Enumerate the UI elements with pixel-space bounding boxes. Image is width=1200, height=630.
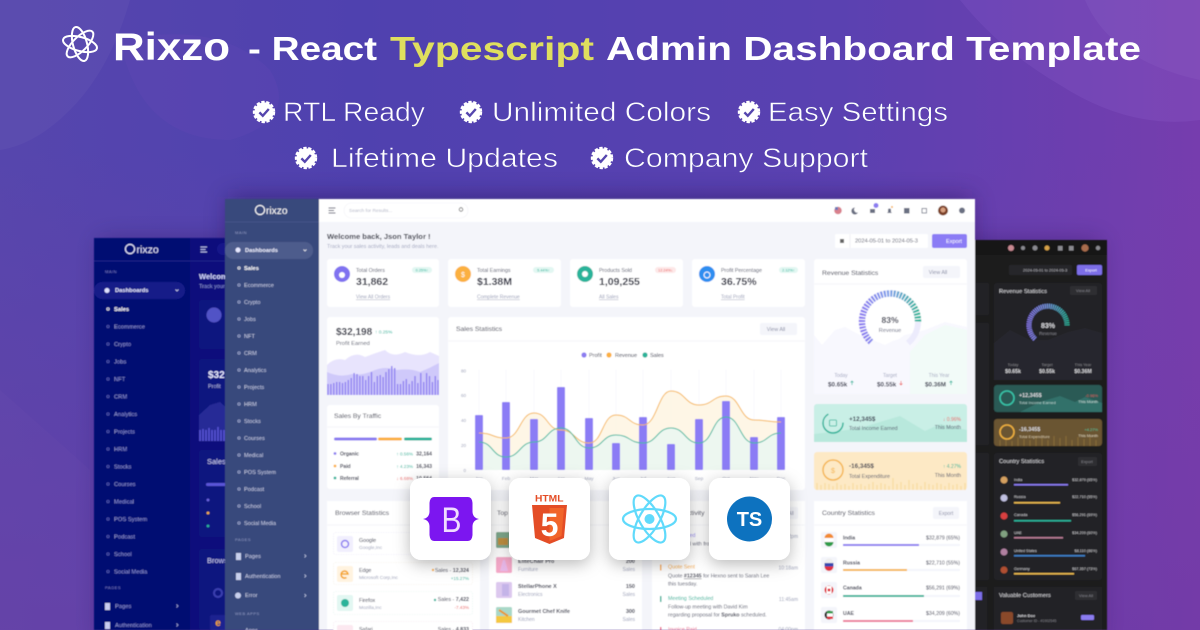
navy sidebar menu: HRM <box>114 447 127 453</box>
browser: firefox: Firefox <box>359 598 376 604</box>
card: products sold: 1,09,255 <box>599 276 640 288</box>
export button <box>932 234 967 248</box>
card: total income: Total Income Earned <box>849 426 898 432</box>
card: products sold <box>570 259 683 307</box>
dark country card: $34,209 (60%) <box>1072 531 1098 535</box>
card: profit earned: Profit Earned <box>336 341 370 347</box>
browser: firefox <box>334 592 472 614</box>
panel: main sidebar: MAIN <box>235 230 247 235</box>
navy sidebar menu: Ecommerce <box>114 324 145 330</box>
panel: dark navy dashboard: Profit <box>208 384 221 390</box>
panel: main sidebar: Sales <box>244 266 259 272</box>
dark country card <box>994 453 1102 580</box>
card: top products: Furniture <box>518 567 538 573</box>
card: sales statistics chart: May <box>584 476 594 482</box>
dark revenue card: Today <box>1008 362 1018 367</box>
dark customers card <box>994 587 1102 630</box>
card: recent activity: 11:45am <box>779 597 798 603</box>
navy sidebar menu: School <box>114 552 132 558</box>
active menu item: Dashboards <box>245 248 278 254</box>
dark income card: +12,345$ <box>1019 393 1042 399</box>
dark country card: Export <box>1081 459 1094 464</box>
welcome heading: Track your sales activity, leads and deals here. <box>327 244 438 250</box>
card: revenue statistics: This Year <box>929 373 950 379</box>
tile: react logo <box>609 478 690 560</box>
card: total earnings: Complete Revenue <box>477 294 520 300</box>
card: total earnings <box>448 259 561 307</box>
sidebar menu: Projects <box>244 385 264 391</box>
dark export button <box>1077 265 1102 275</box>
navy sidebar menu: Jobs <box>114 360 126 366</box>
welcome heading: Welcome back, Json Taylor ! <box>327 232 431 241</box>
sidebar menu: Pages <box>245 554 261 560</box>
card: sales statistics chart: Sep <box>695 476 704 482</box>
card: sales by traffic: Organic <box>340 452 359 458</box>
export button: Export <box>946 239 962 245</box>
panel: dark navy dashboard: Sales <box>207 457 226 466</box>
country rows: $34,209 (60%) <box>926 611 960 617</box>
panel: dark navy dashboard <box>94 238 239 630</box>
dark country card: Russia <box>1014 495 1026 499</box>
dark country card: $32,879 (65%) <box>1072 478 1098 482</box>
card: total income <box>814 404 967 442</box>
card: products sold: Products Sold <box>599 268 632 274</box>
card: profit earned: $32,198 <box>336 327 373 338</box>
card: sales by traffic <box>327 405 439 489</box>
card: revenue statistics <box>814 259 967 394</box>
card: profit percentage: Total Profit <box>721 294 745 300</box>
panel: dark navy dashboard: Brows <box>207 556 228 565</box>
dark revenue card: Target <box>1041 362 1053 367</box>
country rows <box>843 536 960 617</box>
card: total expenditure: -16,345$ <box>849 463 874 470</box>
card: top products: Sales <box>622 567 635 573</box>
sidebar menu: School <box>244 504 261 510</box>
sidebar menu: Podcast <box>244 487 265 493</box>
card: sales by traffic: ↓ 6.68% <box>396 476 413 481</box>
dark country card: $22,710 (55%) <box>1072 495 1098 499</box>
feature list: RTL Ready <box>283 97 426 127</box>
browser: edge <box>334 562 472 584</box>
card: sales statistics chart: View All <box>767 327 785 333</box>
feature list: Company Support <box>624 143 869 173</box>
card: sales statistics chart: Jul <box>640 476 646 482</box>
card: sales by traffic: ↑ 0.56% <box>396 452 413 456</box>
card: top products: Electronics <box>518 592 543 598</box>
country rows: $32,879 (65%) <box>926 536 960 542</box>
dark country card: India <box>1014 478 1023 482</box>
card: total earnings: 5.44%↑ <box>537 268 550 272</box>
dark income card: This Month <box>1078 399 1098 404</box>
dark expenditure card: -16,345$ <box>1019 427 1040 433</box>
card: sales statistics chart: Aug <box>667 476 676 482</box>
sidebar menu: Authentication <box>245 574 280 580</box>
sidebar menu: Social Media <box>244 521 277 527</box>
navy sidebar menu: POS System <box>114 517 147 523</box>
country rows: India <box>843 536 855 542</box>
browser: edge: Microsoft Corp,Inc <box>359 575 399 581</box>
card: top products: 150 <box>626 584 635 590</box>
card: recent activity: this tuesday. <box>668 582 697 588</box>
card: country statistics: Export <box>939 511 954 517</box>
sidebar menu: Stocks <box>244 419 261 425</box>
card: top products: 300 <box>626 609 635 615</box>
dark header icons <box>1008 244 1100 252</box>
dark revenue card: $0.65k <box>1005 369 1021 375</box>
chart legend <box>581 352 664 359</box>
card: recent activity: regarding proposal for Spruko scheduled. <box>668 612 767 618</box>
card: total expenditure: This Month <box>935 473 961 479</box>
bars <box>475 387 785 470</box>
sidebar menu: Jobs <box>244 317 256 323</box>
gauge: Revenue <box>879 328 901 334</box>
card: sales statistics chart: Apr <box>557 476 565 482</box>
dark expenditure card: This Month <box>1078 433 1098 438</box>
card: top products: Gourmet Chef Knife <box>518 609 570 615</box>
navy sidebar menu: Analytics <box>114 412 137 418</box>
sidebar menu: CRM <box>244 351 257 357</box>
tile: bootstrap logo: B <box>442 501 462 540</box>
chart legend: Sales <box>650 353 664 359</box>
browser: edge: Edge <box>359 568 371 574</box>
sidebar menu: Courses <box>244 436 265 442</box>
card: revenue statistics: Revenue Statistics <box>822 270 879 277</box>
card: total orders <box>327 259 439 307</box>
card: products sold: 12.24%↓ <box>658 268 673 272</box>
panel: dark navy dashboard: Dashboards <box>115 288 149 294</box>
card: total expenditure: Total Expenditure <box>849 474 890 480</box>
header icons <box>834 203 965 216</box>
panel: dark navy dashboard: Welcome <box>199 272 232 281</box>
card: total expenditure: $ <box>831 466 836 475</box>
title: - React <box>248 30 377 67</box>
dark country card: UAE <box>1014 531 1022 535</box>
panel: dark navy dashboard: e <box>215 618 221 629</box>
dark left fragments <box>975 283 989 315</box>
card: revenue statistics: Target <box>883 373 898 379</box>
dark revenue card: $0.36M <box>1074 369 1092 375</box>
card: recent activity: 10:18am <box>779 566 798 572</box>
dark country card: Canada <box>1014 513 1028 517</box>
sidebar logo: rixzo <box>266 206 288 217</box>
dark country card: United States <box>1014 549 1037 553</box>
chart axes: 20 <box>461 443 466 448</box>
card: sales statistics chart: Oct <box>722 476 730 482</box>
navy sidebar menu: Courses <box>114 482 136 488</box>
card: recent activity: Recent Activity <box>660 510 705 517</box>
chart axes: 60 <box>461 393 466 398</box>
panel: dark navy dashboard: MAIN <box>105 269 117 274</box>
card: sales statistics chart: Jun <box>612 476 620 482</box>
card: sales by traffic: Referral <box>340 476 360 482</box>
card: recent activity: Deal Added <box>668 533 695 539</box>
card: sales statistics chart: Sales Statistics <box>456 326 503 333</box>
card: profit percentage: 36.75% <box>721 276 757 288</box>
sidebar menu: NFT <box>244 334 255 340</box>
card: top products: Sales <box>622 617 635 623</box>
navy sidebar menu: Projects <box>114 430 135 436</box>
panel: dark dashboard <box>960 240 1107 630</box>
card: top products: 200 <box>626 559 635 565</box>
feature list: Lifetime Updates <box>331 143 558 173</box>
tile: typescript logo: TS <box>737 509 762 531</box>
card: total income: +12,345$ <box>849 416 876 423</box>
navy sidebar menu: Stocks <box>114 464 131 470</box>
card: top products: EliteChair Pro <box>518 559 555 565</box>
header bar: Search for Results... <box>349 208 392 214</box>
title: Typescript <box>390 30 594 67</box>
title: Rixzo <box>113 26 230 69</box>
date range <box>835 234 928 248</box>
card: recent activity: 09:32pm <box>779 534 798 540</box>
card: sales by traffic: Paid <box>340 464 351 470</box>
feature list <box>254 97 948 173</box>
card: top products: Sales <box>622 592 635 598</box>
tile: typescript logo <box>709 478 790 560</box>
dark revenue card: 83% <box>1041 323 1056 330</box>
card: revenue statistics: View All <box>929 270 947 276</box>
country rows: Russia <box>843 560 860 566</box>
dark customers card: Customer ID - #1902545 <box>1017 619 1056 623</box>
dark income card: -0.96% <box>1085 393 1098 398</box>
sidebar menu: Medical <box>244 453 263 459</box>
dark country card: Germany <box>1014 567 1030 571</box>
title: Admin Dashboard Template <box>606 30 1141 67</box>
card: revenue statistics: $0.55k <box>877 382 897 388</box>
card: sales statistics chart: Feb <box>502 476 510 482</box>
card: recent activity: Quote #12345 for Hexno sent to Sarah Lee <box>668 574 769 580</box>
browser: google: Google <box>359 538 376 544</box>
card: sales statistics chart: Mar <box>530 476 539 482</box>
dark revenue card <box>994 283 1102 380</box>
chart legend: Revenue <box>615 353 637 359</box>
chart axes: 80 <box>461 368 466 374</box>
navy logo <box>125 244 159 256</box>
dark revenue card: This Year <box>1075 362 1092 367</box>
dark expenditure card: Total Expenditure <box>1019 434 1051 439</box>
dark expenditure card: +4.27% <box>1084 427 1098 432</box>
chart axes <box>461 368 466 473</box>
gauge: 83% <box>881 315 899 325</box>
navy sidebar menu: Podcast <box>114 534 135 540</box>
panel: dark navy dashboard: Sales <box>114 307 129 313</box>
panel: dark navy dashboard: PAGES <box>105 585 121 590</box>
card: recent activity: Follow-up meeting with David Kim <box>668 604 748 610</box>
chart legend: Profit <box>589 353 602 359</box>
browser: google <box>334 532 472 554</box>
browser: firefox: Mozilla,Inc <box>359 605 382 611</box>
country rows: UAE <box>843 611 854 617</box>
card: revenue statistics: $0.36M <box>925 382 946 388</box>
card: top products: Top Products <box>497 510 537 517</box>
navy sidebar menu <box>114 324 152 629</box>
country rows: Canada <box>843 586 862 592</box>
sidebar menu: POS System <box>244 470 276 476</box>
card: sales statistics chart: Jan <box>475 476 483 482</box>
active menu item <box>225 242 313 259</box>
card: sales by traffic: 32,164 <box>416 452 432 458</box>
dark customers card: John Doe <box>1017 613 1036 618</box>
card: revenue statistics: $0.65k <box>828 382 848 388</box>
navy sidebar menu: Social Media <box>114 570 148 576</box>
card: total expenditure: ↑ 4.27% <box>943 464 962 470</box>
navy sidebar menu: NFT <box>114 377 126 383</box>
navy sidebar menu: Authentication <box>115 623 152 629</box>
sidebar menu <box>244 283 280 630</box>
card: top products <box>489 501 642 630</box>
tile: html5 logo: 5 <box>541 507 558 543</box>
dark country card: $8,110 (86%) <box>1074 549 1098 553</box>
panel: dark dashboard: 2024-05-01 to 2024-05-3 <box>1023 268 1068 272</box>
card: profit percentage <box>692 259 805 307</box>
sidebar menu: HRM <box>244 402 257 408</box>
tile: bootstrap logo <box>410 478 491 560</box>
dark country card: Country Statistics <box>999 459 1044 465</box>
feature list: Easy Settings <box>768 97 948 127</box>
card: browser statistics <box>327 501 480 630</box>
sidebar menu: Ecommerce <box>244 283 274 289</box>
icon: rixzo logo <box>61 25 99 63</box>
country rows: $22,710 (55%) <box>926 560 960 566</box>
card: recent activity <box>652 501 805 630</box>
gauge <box>862 293 918 343</box>
dark revenue card: $0.55k <box>1039 369 1055 375</box>
country rows: $56,291 (69%) <box>926 586 960 592</box>
date range: 2024-05-01 to 2024-05-3 <box>855 238 918 244</box>
card: profit percentage: 2.12%↑ <box>782 268 795 272</box>
card: sales by traffic: Sales By Traffic <box>334 413 382 420</box>
dark revenue card: Revenue Statistics <box>999 289 1047 295</box>
card: total expenditure <box>814 452 967 490</box>
card: sales statistics chart: Nov <box>750 476 759 482</box>
card: recent activity: View All <box>776 511 794 517</box>
card: recent activity: Quote Sent <box>668 564 695 570</box>
card: sales by traffic: 16,343 <box>416 464 432 470</box>
card: total income: ↓ 0.96% <box>943 417 962 423</box>
dark export button: Export <box>1085 268 1098 272</box>
card: country statistics: Country Statistics <box>822 510 875 517</box>
area chart <box>327 350 439 395</box>
card: top products: StellarPhone X <box>518 584 557 590</box>
browser: edge: Sales - 12,324 <box>435 568 469 574</box>
card: total income: This Month <box>935 425 961 431</box>
revenue line <box>479 391 781 443</box>
navy logo: rixzo <box>136 244 159 256</box>
card: profit percentage: Profit Percentage <box>721 268 762 274</box>
dark customers card: Valuable Customers <box>999 593 1051 599</box>
dark revenue card: View All <box>1076 288 1090 293</box>
panel: main sidebar: PAGES <box>235 537 251 542</box>
sales line <box>479 417 781 457</box>
card: total orders: 31,862 <box>356 276 388 288</box>
dark customers card: View All <box>1079 593 1093 598</box>
card: sales by traffic: ↑ 4.23% <box>396 464 413 469</box>
card: top products: Kitchen <box>518 617 535 623</box>
dark income card: Total Income Earned <box>1019 400 1056 405</box>
card: total earnings: $ <box>461 272 465 279</box>
panel: main content <box>319 199 975 630</box>
card: total earnings: $1.38M <box>477 276 512 288</box>
navy sidebar menu: Crypto <box>114 342 131 348</box>
card: total earnings: Total Earnings <box>477 268 511 274</box>
tile: html5 logo <box>509 478 590 560</box>
card: total orders: View All Orders <box>356 294 391 300</box>
card: sales by traffic: 10,564 <box>416 476 432 482</box>
dark income card <box>994 385 1102 412</box>
dark revenue card: Revenue <box>1039 331 1057 336</box>
card: profit earned <box>327 317 439 395</box>
card: recent activity: Meeting Scheduled <box>668 596 713 602</box>
browser: firefox: Sales - 7,422 <box>438 597 469 603</box>
card: country statistics <box>814 501 967 630</box>
dark expenditure card <box>994 419 1102 446</box>
card: recent activity: Neekipa <box>668 550 688 556</box>
dark date box <box>1009 265 1072 275</box>
feature list: Unlimited Colors <box>492 97 711 127</box>
dark country card: $56,291 (69%) <box>1072 513 1098 517</box>
card: browser statistics: Browser Statistics <box>335 510 390 517</box>
card: sales statistics chart: Dec <box>777 476 786 482</box>
sidebar menu: Error <box>245 593 258 599</box>
browser: safari <box>334 622 472 630</box>
navy sidebar menu: Medical <box>114 500 134 506</box>
card: recent activity: New Deal with from <box>668 542 715 548</box>
chart axes: 0 <box>463 468 466 473</box>
title <box>61 25 1141 69</box>
card: products sold: All Sales <box>599 294 619 300</box>
panel: dark navy dashboard: Track your <box>199 284 225 290</box>
card: total orders: Total Orders <box>356 268 385 274</box>
header bar <box>319 199 975 222</box>
sidebar menu: Analytics <box>244 368 267 374</box>
panel: main sidebar: WEB APPS <box>235 611 260 616</box>
chart axes: 40 <box>461 418 466 423</box>
card: total orders: 0.25%↑ <box>416 268 428 272</box>
card: profit earned: ↑ 0.25% <box>375 330 393 336</box>
browser: google: Google,Inc <box>359 545 383 551</box>
panel: dark navy dashboard: $32 <box>208 370 225 381</box>
card: revenue statistics: Today <box>834 373 848 379</box>
dark country card: $67,357 (73%) <box>1072 567 1098 571</box>
browser: firefox: -7.43% <box>454 605 469 610</box>
browser: edge: +15.27% <box>451 576 469 581</box>
sidebar logo <box>255 205 288 217</box>
welcome heading <box>327 232 438 250</box>
navy sidebar menu: CRM <box>114 394 127 400</box>
tile: html5 logo: HTML <box>535 494 564 504</box>
flags <box>821 532 837 623</box>
navy sidebar menu: Pages <box>115 604 132 610</box>
card: sales statistics chart <box>448 317 805 490</box>
panel: main sidebar <box>225 199 319 630</box>
sidebar menu: Crypto <box>244 300 260 306</box>
